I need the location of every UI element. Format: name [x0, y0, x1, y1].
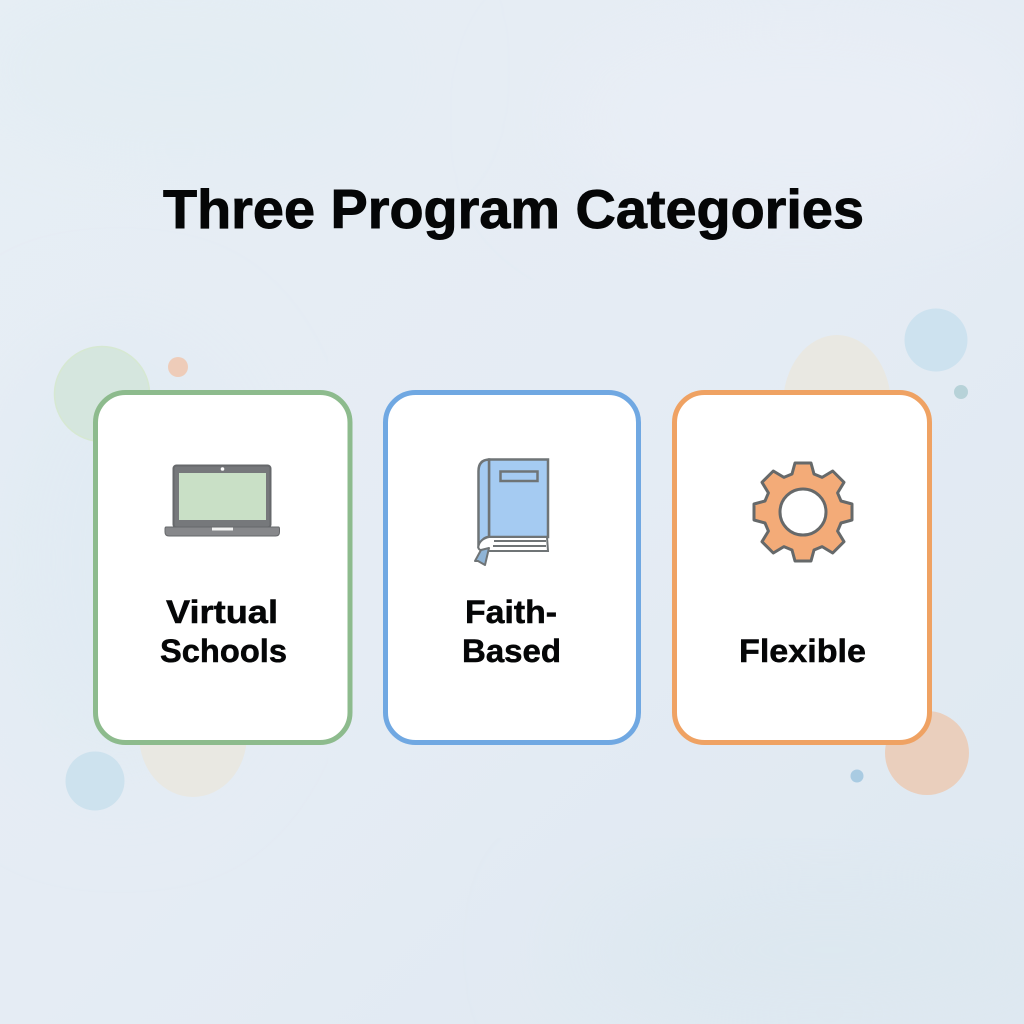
card frame: virtual schools [96, 392, 350, 742]
label: flexible: Flexible [739, 633, 866, 669]
label: faith-based: Faith- [465, 594, 557, 630]
icon: book [475, 460, 548, 565]
label: faith-based: Based [462, 633, 561, 669]
icon: laptop [165, 466, 280, 536]
label: virtual schools: Schools [160, 633, 287, 669]
decorative circles behind cards [54, 308, 969, 810]
panel: virtual schools [96, 392, 350, 742]
title: Three Program Categories [163, 178, 864, 240]
label: faith-based [462, 594, 561, 669]
icon: gear [754, 463, 852, 561]
panel: flexible [674, 392, 930, 742]
label: virtual schools: Virtual [166, 594, 278, 630]
card frame: flexible [674, 392, 930, 742]
panel: faith-based [386, 392, 638, 742]
card frame: faith-based [386, 392, 638, 742]
label: virtual schools [160, 594, 287, 669]
